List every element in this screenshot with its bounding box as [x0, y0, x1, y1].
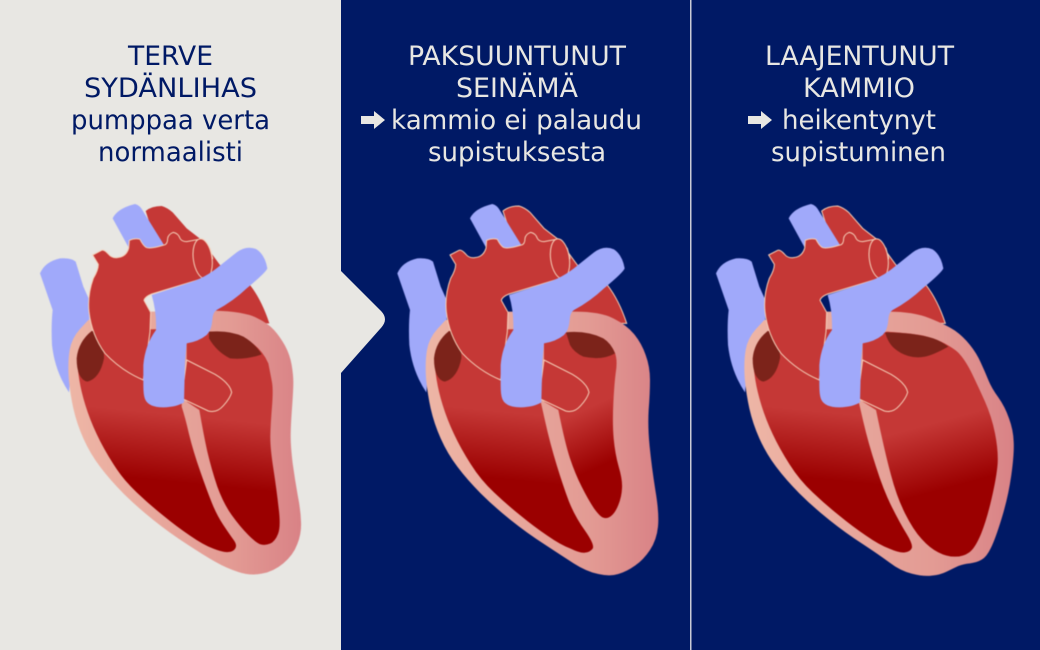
- panel divider: [690, 0, 692, 650]
- heading: healthy: normaalisti: [98, 137, 243, 168]
- heading: thickened wall: [361, 41, 642, 168]
- heading: dilated ventricle: heikentynyt: [782, 105, 936, 136]
- heart: thickened wall: [397, 204, 658, 575]
- panel: healthy heart muscle: [0, 0, 385, 650]
- heading: healthy: [71, 41, 270, 168]
- heart: healthy: [40, 204, 301, 575]
- arrow icon: [748, 111, 772, 129]
- heading: thickened wall: SEINÄMÄ: [456, 72, 578, 104]
- heart: dilated ventricle: [716, 204, 1014, 576]
- heading: dilated ventricle: supistuminen: [771, 137, 946, 168]
- heading: healthy: SYDÄNLIHAS: [84, 72, 257, 104]
- arrow icon: [361, 111, 385, 129]
- heading: dilated ventricle: [748, 41, 955, 168]
- heading: healthy: pumppaa verta: [71, 105, 270, 136]
- heading: thickened wall: supistuksesta: [428, 137, 606, 168]
- heading: healthy: TERVE: [127, 41, 213, 72]
- pointer arrow between panels: [341, 271, 385, 373]
- heading: dilated ventricle: KAMMIO: [803, 73, 915, 104]
- heading: thickened wall: PAKSUUNTUNUT: [408, 41, 627, 72]
- heading: thickened wall: kammio ei palaudu: [391, 105, 642, 136]
- heading: dilated ventricle: LAAJENTUNUT: [765, 41, 955, 72]
